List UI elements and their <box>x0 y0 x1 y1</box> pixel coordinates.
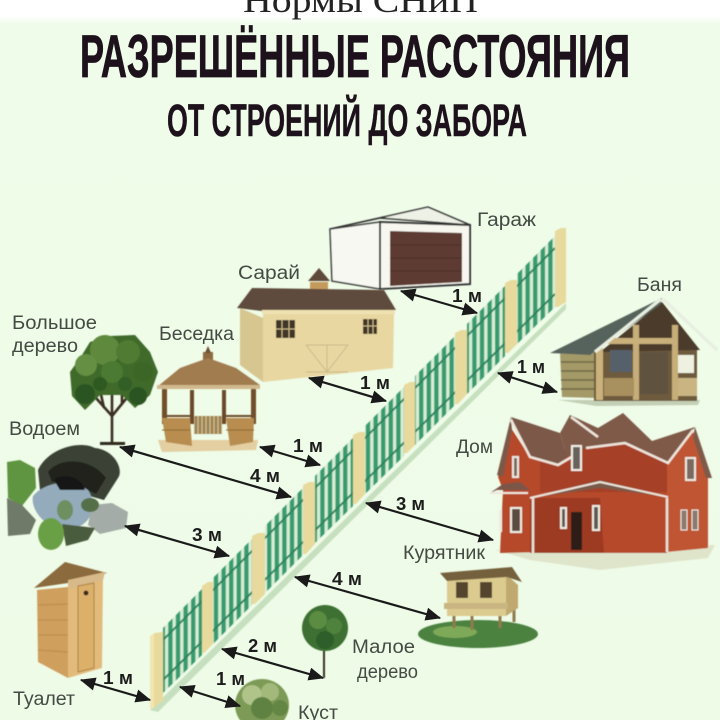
gazebo <box>157 346 260 452</box>
label: coop: Курятник <box>403 543 486 564</box>
distance: bush: 1 м <box>216 669 245 689</box>
chicken coop <box>418 567 538 648</box>
label: house: Дом <box>456 437 493 458</box>
arrow: bathhouse 1 m <box>498 373 557 392</box>
arrow: coop 4 m <box>295 577 440 618</box>
label: bathhouse: Баня <box>637 275 682 296</box>
distance: coop: 4 м <box>332 569 362 589</box>
distance: garage: 1 м <box>452 286 482 306</box>
small tree <box>302 605 348 678</box>
label: pond: Водоем <box>9 419 80 440</box>
distance: pond: 3 м <box>192 525 222 545</box>
arrow: small tree 2 m <box>222 649 323 678</box>
arrow: big tree 4 m <box>120 447 291 497</box>
distance: small tree: 2 м <box>248 636 277 656</box>
bush <box>235 679 289 720</box>
bathhouse <box>550 298 717 406</box>
label: gazebo: Беседка <box>159 324 234 345</box>
label: garage: Гараж <box>477 210 536 231</box>
house <box>490 413 715 570</box>
arrow: bush 1 m <box>180 687 240 706</box>
label: shed: Сарай <box>238 263 300 284</box>
label: big tree: Большое <box>12 313 97 334</box>
shed <box>237 268 396 382</box>
label: toilet: Туалет <box>13 689 75 710</box>
distance: shed: 1 м <box>360 373 390 393</box>
pond <box>7 445 128 550</box>
big tree <box>70 335 158 445</box>
garage <box>330 207 470 289</box>
label: big tree: дерево <box>12 336 78 357</box>
toilet <box>34 562 107 678</box>
arrow: toilet 1 m <box>81 680 150 700</box>
distance: gazebo: 1 м <box>293 436 323 456</box>
fence <box>150 228 566 712</box>
distance: bathhouse: 1 м <box>517 357 545 377</box>
distance: house: 3 м <box>396 494 425 514</box>
arrow: garage 1 m <box>401 291 477 313</box>
arrow: shed 1 m <box>309 378 386 401</box>
arrow: gazebo 1 m <box>260 447 320 465</box>
arrow: house 3 m <box>366 503 493 540</box>
label: small tree: дерево <box>357 662 418 683</box>
distance: big tree: 4 м <box>250 466 280 486</box>
label: small tree: Малое <box>352 637 415 658</box>
arrow: pond 3 m <box>125 526 229 556</box>
distance: toilet: 1 м <box>103 668 133 688</box>
